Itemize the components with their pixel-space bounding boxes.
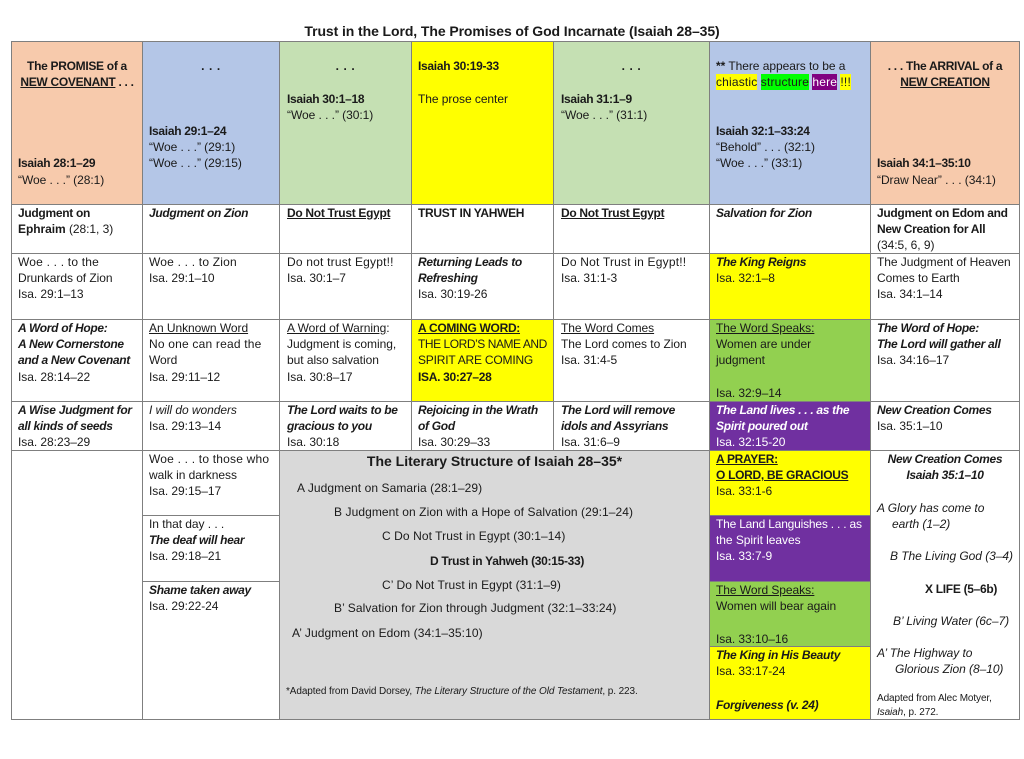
- lower: The Word Speaks, women will bear again: Women will bear again: [716, 599, 836, 613]
- row 2: Do Not Trust Egypt: Do Not Trust Egypt: [287, 206, 390, 220]
- row 2: Judgment on Ephraim: [11, 204, 143, 254]
- panel heading: The Literary Structure of Isaiah 28–35*: [367, 453, 622, 469]
- row 4: The Word of Hope: [870, 319, 1020, 402]
- row 5: The Lord waits: The Lord waits to be: [287, 403, 398, 417]
- row 2: Do Not Trust Egypt: [279, 204, 412, 254]
- row 3: Returning Leads to Refreshing: Refreshing: [418, 271, 478, 285]
- row 5: The Lord waits: Isa. 30:18: [287, 435, 339, 449]
- row 3: Returning Leads to Refreshing: [411, 253, 554, 320]
- row 4: The Word of Hope: Isa. 34:16–17: [877, 353, 949, 367]
- lower: The deaf will hear: [142, 515, 280, 582]
- row 2: Do Not Trust Egypt: Do Not Trust Egypt: [561, 206, 664, 220]
- row 5: The Land lives: The Land lives . . . as the: [716, 403, 849, 417]
- header: Isaiah 34-35 arrival of a new creation: NEW CREATION: [900, 75, 990, 89]
- structure line B: B Judgment on Zion with a Hope of Salvation (29:1–24): [334, 505, 633, 519]
- row 4: An Unknown Word: Isa. 29:11–12: [149, 370, 220, 384]
- header: Isaiah 29: “Woe . . .” (29:15): [149, 156, 242, 170]
- row 5: I will do wonders: I will do wonders: [149, 403, 237, 417]
- row 3: Do Not Trust in Egypt: Do Not Trust in Egypt!!: [561, 255, 686, 269]
- row 5: Rejoicing in the Wrath: of God: [418, 419, 455, 433]
- row 4: The Word Speaks, women under judgment: judgment: [716, 353, 765, 367]
- row 4: The Word of Hope: The Lord will gather all: [877, 337, 1000, 351]
- lower: The King in His Beauty: Forgiveness (v. 24): [716, 698, 818, 712]
- lower: The Land Languishes: The Land Languishes . . . as: [716, 517, 862, 531]
- header: Isaiah 34-35 arrival of a new creation: “Draw Near” . . . (34:1): [877, 172, 996, 186]
- header: Isaiah 30:1-18: Isaiah 30:1–18: [287, 92, 364, 106]
- row 3: Do Not Trust in Egypt: [553, 253, 710, 320]
- row 3: Do not trust Egypt: Do not trust Egypt!!: [287, 255, 394, 269]
- header: Isaiah 29: Isaiah 29:1–24: [149, 124, 226, 138]
- row 2: Trust in Yahweh: [411, 204, 554, 254]
- header: Isaiah 34-35 arrival of a new creation: . . . The ARRIVAL of a: [888, 59, 1002, 73]
- header: Isaiah 28 promise of a new covenant: [11, 41, 143, 205]
- outline X: X LIFE (5–6b): [925, 582, 997, 596]
- lower: Woe to those who walk in darkness: Woe . . . to those who: [149, 452, 269, 466]
- row 4: The Word Speaks, women under judgment: The Word Speaks:: [716, 321, 814, 335]
- outline A: earth (1–2): [892, 517, 950, 531]
- row 3: Do not trust Egypt: [279, 253, 412, 320]
- header: Isaiah 34-35 arrival of a new creation: [870, 41, 1020, 205]
- row 5: Rejoicing in the Wrath: Rejoicing in the Wrath: [418, 403, 538, 417]
- row 4: A Coming Word: ISA. 30:27–28: [418, 370, 492, 384]
- outline source: Adapted from Alec Motyer,: [877, 693, 992, 704]
- lower: The Word Speaks, women will bear again: [709, 581, 871, 647]
- header: Isaiah 32-33 with chiastic note: !!!: [840, 75, 851, 89]
- row 5: A Wise Judgment: Isa. 28:23–29: [18, 435, 90, 449]
- row 3: Woe to the Drunkards of Zion: Drunkards of Zion: [18, 271, 113, 285]
- row 4: A Coming Word: THE LORD’S NAME AND: [418, 337, 547, 351]
- row 5: Rejoicing in the Wrath: Isa. 30:29–33: [418, 435, 490, 449]
- outline heading: [888, 452, 1002, 482]
- row 3: Woe to Zion: Isa. 29:1–10: [149, 271, 214, 285]
- lower: The King in His Beauty: The King in His Beauty: [716, 648, 840, 662]
- row 3: The King Reigns: The King Reigns: [716, 255, 806, 269]
- row 4: An Unknown Word: No one can read the: [149, 337, 262, 351]
- row 4: A Coming Word: A COMING WORD:: [418, 321, 520, 335]
- row 3: Judgment of Heaven: Comes to Earth: [877, 271, 960, 285]
- row 2: Salvation for Zion: [709, 204, 871, 254]
- row 2: Judgment on Ephraim: Judgment on: [18, 206, 90, 220]
- outline A: [876, 501, 984, 531]
- header: Isaiah 30:19-33: The prose center: [418, 92, 508, 106]
- row 5: A Wise Judgment: [11, 401, 143, 451]
- row 4: A Word of Warning: Isa. 30:8–17: [287, 370, 352, 384]
- row 2: Trust in Yahweh: TRUST IN YAHWEH: [418, 206, 524, 220]
- outline B: B The Living God (3–4): [890, 549, 1013, 563]
- structure line D: D Trust in Yahweh (30:15-33): [430, 554, 584, 568]
- row 5: The Lord will remove idols: idols and Assyrians: [561, 419, 668, 433]
- row 4: A Word of Hope: and a New Covenant: [18, 353, 130, 367]
- row 3: Woe to Zion: [142, 253, 280, 320]
- lower: The Word Speaks, women will bear again: The Word Speaks:: [716, 583, 814, 597]
- structure line A: A Judgment on Samaria (28:1–29): [297, 481, 482, 495]
- row 5: New Creation Comes: New Creation Comes: [877, 403, 992, 417]
- lower: The King in His Beauty: [709, 646, 871, 720]
- header: Isaiah 31: . . .: [622, 59, 641, 73]
- row 5: New Creation Comes: [870, 401, 1020, 451]
- row 2: Judgment on Zion: Judgment on Zion: [149, 206, 248, 220]
- row 4: The Word Speaks, women under judgment: Isa. 32:9–14: [716, 386, 781, 400]
- row 4: An Unknown Word: [142, 319, 280, 402]
- row 4: A Word of Warning: A Word of Warning:: [287, 321, 390, 335]
- lower: A Prayer: [709, 450, 871, 516]
- header: Isaiah 32-33 with chiastic note: “Woe . . .” (33:1): [716, 156, 802, 170]
- lower: A Prayer: O LORD, BE GRACIOUS: [716, 468, 848, 482]
- lower: The Word Speaks, women will bear again: Isa. 33:10–16: [716, 632, 788, 646]
- header: Isaiah 34-35 arrival of a new creation: Isaiah 34:1–35:10: [877, 156, 971, 170]
- header: Isaiah 32-33 with chiastic note: ** There appears to be a: [716, 59, 845, 73]
- outline source: Isaiah, p. 272.: [877, 707, 938, 718]
- lower: The Land Languishes: Isa. 33:7-9: [716, 549, 772, 563]
- row 5: The Land lives: Isa. 32:15-20: [716, 435, 785, 449]
- footnote: *Adapted from David Dorsey, The Literary Structure of the Old Testament, p. 223.: [286, 686, 638, 697]
- outline A: A Glory has come to: [877, 501, 984, 515]
- header: Isaiah 30:1-18: “Woe . . .” (30:1): [287, 108, 373, 122]
- row 3: The King Reigns: Isa. 32:1–8: [716, 271, 775, 285]
- outline source: [877, 693, 992, 718]
- row 4: The Word Speaks, women under judgment: Women are under: [716, 337, 811, 351]
- structure line C: C Do Not Trust in Egypt (30:1–14): [382, 529, 565, 543]
- row 3: Returning Leads to Refreshing: Isa. 30:19-26: [418, 287, 487, 301]
- header: Isaiah 30:19-33: Isaiah 30:19-33: [418, 59, 499, 73]
- row 4: A Coming Word: SPIRIT ARE COMING: [418, 353, 533, 367]
- lower: The deaf will hear: In that day . . .: [149, 517, 224, 531]
- row 2: Judgment on Edom: Judgment on Edom and: [877, 206, 1008, 220]
- header: Isaiah 32-33 with chiastic note: [709, 41, 871, 205]
- lower: The King in His Beauty: Isa. 33:17-24: [716, 664, 785, 678]
- row 5: New Creation Comes: Isa. 35:1–10: [877, 419, 942, 433]
- lower left: empty cell: [11, 450, 143, 720]
- header: Isaiah 28 promise of a new covenant: NEW COVENANT . . .: [20, 75, 134, 89]
- header: Isaiah 28 promise of a new covenant: Isaiah 28:1–29: [18, 156, 95, 170]
- row 2: Judgment on Edom: New Creation for All: [877, 222, 985, 236]
- lower: Shame taken away: Shame taken away: [149, 583, 251, 597]
- header: Isaiah 28 promise of a new covenant: “Woe . . .” (28:1): [18, 172, 104, 186]
- lower: A Prayer: Isa. 33:1-6: [716, 484, 772, 498]
- outline heading: Isaiah 35:1–10: [906, 468, 984, 482]
- lower: Shame taken away: [142, 581, 280, 720]
- row 4: A Word of Hope: [11, 319, 143, 402]
- structure line B prime: B’ Salvation for Zion through Judgment (32:1–33:24): [334, 601, 616, 615]
- row 3: Judgment of Heaven: Isa. 34:1–14: [877, 287, 942, 301]
- outline A prime: [876, 646, 1003, 676]
- row 3: Judgment of Heaven: The Judgment of Heaven: [877, 255, 1011, 269]
- row 4: A Word of Warning: Judgment is coming,: [287, 337, 396, 351]
- lower right: New Creation Comes outline: [870, 450, 1020, 720]
- row 2: Judgment on Ephraim: Ephraim (28:1, 3): [18, 222, 113, 236]
- row 5: A Wise Judgment: all kinds of seeds: [18, 419, 113, 433]
- row 3: Woe to the Drunkards of Zion: Isa. 29:1–13: [18, 287, 83, 301]
- lower: Woe to those who walk in darkness: walk in darkness: [149, 468, 237, 482]
- header: Isaiah 29: . . .: [201, 59, 221, 73]
- row 3: Woe to the Drunkards of Zion: [11, 253, 143, 320]
- row 4: The Word Speaks, women under judgment: [709, 319, 871, 402]
- outline A prime: A’ The Highway to: [877, 646, 972, 660]
- row 3: Do not trust Egypt: Isa. 30:1–7: [287, 271, 346, 285]
- row 2: Judgment on Zion: [142, 204, 280, 254]
- row 4: An Unknown Word: Word: [149, 353, 177, 367]
- row 5: Rejoicing in the Wrath: [411, 401, 554, 451]
- row 4: The Word of Hope: The Word of Hope:: [877, 321, 979, 335]
- row 5: The Land lives: Spirit poured out: [716, 419, 808, 433]
- header: Isaiah 30:19-33: [411, 41, 554, 205]
- panel: literary structure of Isaiah 28-35: [279, 450, 710, 720]
- row 5: The Lord waits: [279, 401, 412, 451]
- header: Isaiah 32-33 with chiastic note: chiastic: [716, 75, 757, 89]
- row 2: Judgment on Edom: [870, 204, 1020, 254]
- row 4: A Coming Word: [411, 319, 554, 402]
- lower: The Land Languishes: [709, 515, 871, 582]
- row 4: A Word of Warning: [279, 319, 412, 402]
- row 4: An Unknown Word: An Unknown Word: [149, 321, 248, 335]
- row 5: A Wise Judgment: A Wise Judgment for: [18, 403, 132, 417]
- row 4: The Word Comes: Isa. 31:4-5: [561, 353, 617, 367]
- title: Trust in the Lord, The Promises of God Incarnate (Isaiah 28–35): [304, 23, 720, 39]
- row 4: A Word of Warning: but also salvation: [287, 353, 379, 367]
- row 2: Judgment on Edom: (34:5, 6, 9): [877, 238, 934, 252]
- row 5: I will do wonders: Isa. 29:13–14: [149, 419, 221, 433]
- row 5: The Lord waits: gracious to you: [287, 419, 372, 433]
- row 2: Do Not Trust Egypt: [553, 204, 710, 254]
- row 5: The Lord will remove idols: The Lord will remove: [561, 403, 675, 417]
- header: Isaiah 32-33 with chiastic note: structure: [761, 75, 809, 89]
- outline A prime: Glorious Zion (8–10): [895, 662, 1003, 676]
- row 5: The Land lives: [709, 401, 871, 451]
- row 5: The Lord will remove idols: Isa. 31:6–9: [561, 435, 620, 449]
- header: Isaiah 31: “Woe . . .” (31:1): [561, 108, 647, 122]
- row 3: Do Not Trust in Egypt: Isa. 31:1-3: [561, 271, 617, 285]
- structure line A prime: A’ Judgment on Edom (34:1–35:10): [292, 626, 483, 640]
- header: Isaiah 30:1-18: [279, 41, 412, 205]
- header: Isaiah 32-33 with chiastic note: Isaiah 32:1–33:24: [716, 124, 810, 138]
- row 4: A Word of Hope: A New Cornerstone: [18, 337, 124, 351]
- lower: The deaf will hear: The deaf will hear: [149, 533, 244, 547]
- row 5: The Lord will remove idols: [553, 401, 710, 451]
- row 4: A Word of Hope: A Word of Hope:: [18, 321, 108, 335]
- lower: The Land Languishes: the Spirit leaves: [716, 533, 801, 547]
- outline B prime: B’ Living Water (6c–7): [893, 614, 1009, 628]
- structure line C prime: C’ Do Not Trust in Egypt (31:1–9): [382, 578, 561, 592]
- row 3: Judgment of Heaven: [870, 253, 1020, 320]
- row 4: The Word Comes: The Word Comes: [561, 321, 654, 335]
- lower: Woe to those who walk in darkness: [142, 450, 280, 516]
- row 4: The Word Comes: [553, 319, 710, 402]
- row 5: I will do wonders: [142, 401, 280, 451]
- row 3: Woe to Zion: Woe . . . to Zion: [149, 255, 237, 269]
- lower: The deaf will hear: Isa. 29:18–21: [149, 549, 221, 563]
- row 4: A Word of Hope: Isa. 28:14–22: [18, 370, 90, 384]
- header: Isaiah 32-33 with chiastic note: here: [812, 75, 837, 89]
- header: Isaiah 29: [142, 41, 280, 205]
- lower: Woe to those who walk in darkness: Isa. 29:15–17: [149, 484, 221, 498]
- header: Isaiah 31: [553, 41, 710, 205]
- header: Isaiah 29: “Woe . . .” (29:1): [149, 140, 235, 154]
- lower: Shame taken away: Isa. 29:22-24: [149, 599, 218, 613]
- header: Isaiah 28 promise of a new covenant: The PROMISE of a: [27, 59, 127, 73]
- row 3: The King Reigns: [709, 253, 871, 320]
- outline heading: New Creation Comes: [888, 452, 1002, 466]
- lower: A Prayer: A PRAYER:: [716, 452, 778, 466]
- header: Isaiah 31: Isaiah 31:1–9: [561, 92, 632, 106]
- header: Isaiah 30:1-18: . . .: [336, 59, 355, 73]
- row 3: Woe to the Drunkards of Zion: Woe . . . to the: [18, 255, 99, 269]
- row 3: Returning Leads to Refreshing: Returning Leads to: [418, 255, 522, 269]
- row 4: The Word Comes: The Lord comes to Zion: [561, 337, 687, 351]
- header: Isaiah 32-33 with chiastic note: “Behold” . . . (32:1): [716, 140, 815, 154]
- row 2: Salvation for Zion: Salvation for Zion: [716, 206, 812, 220]
